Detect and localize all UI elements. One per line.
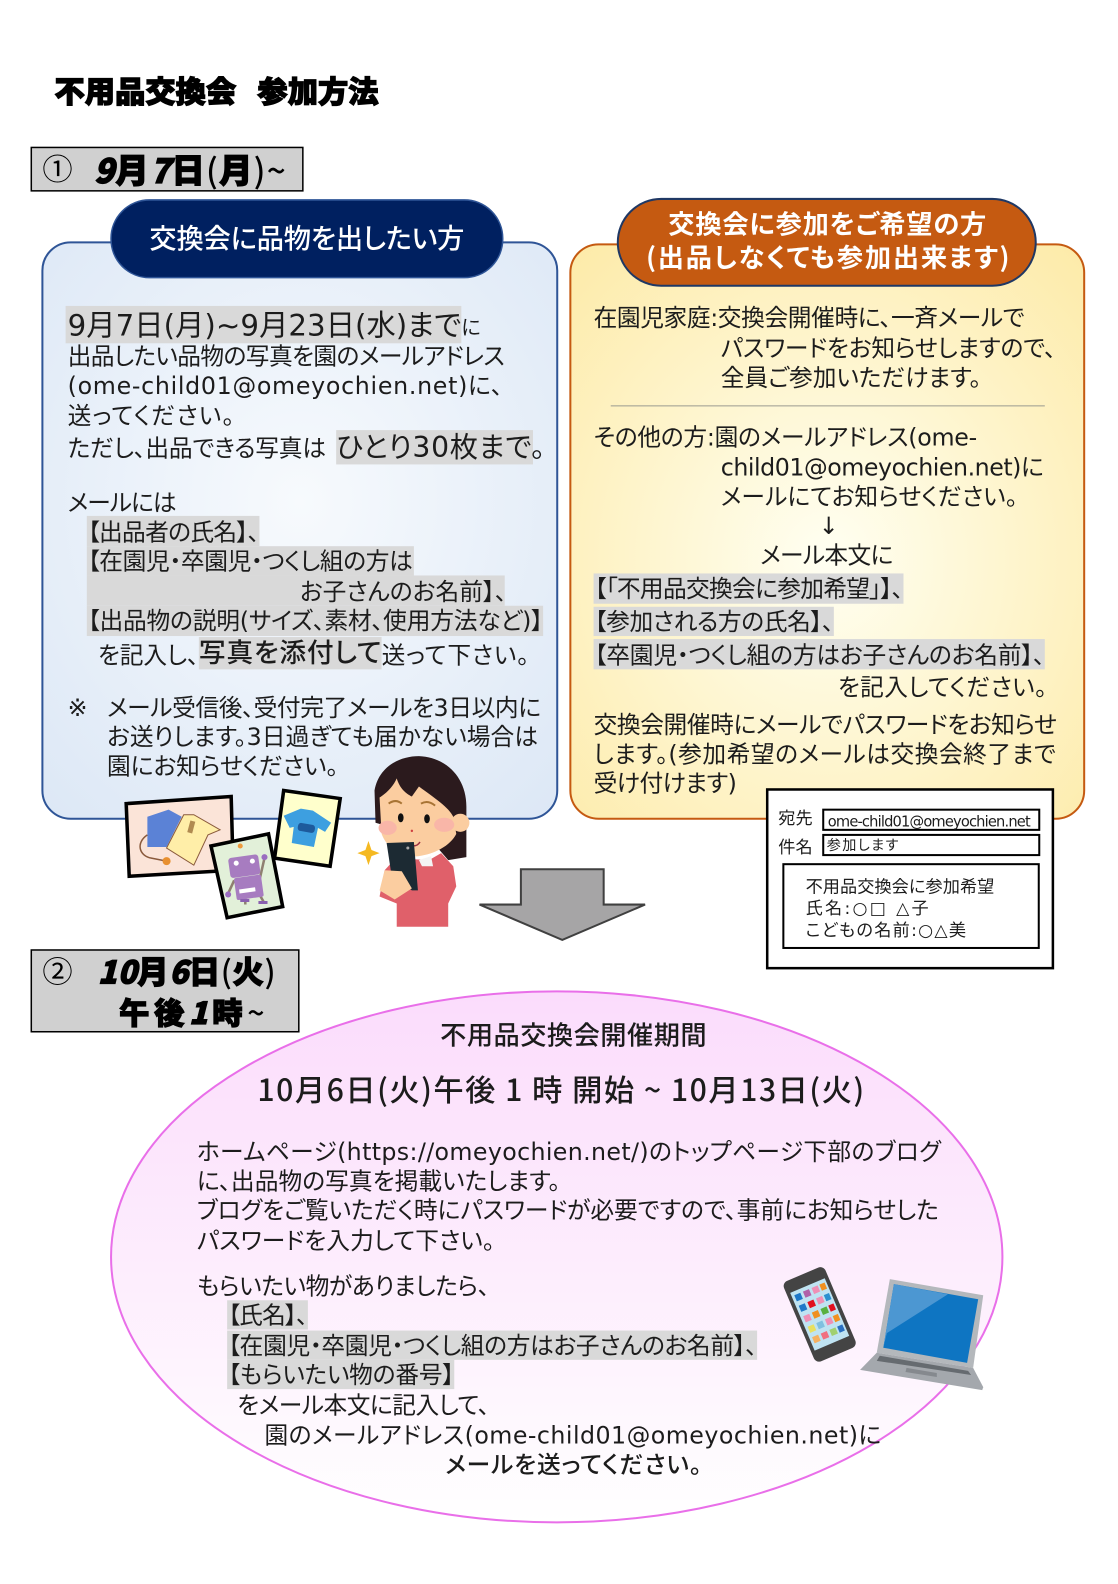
- submission period and address text: [66, 306, 545, 464]
- required mail contents text: 送って下さい。: [382, 641, 529, 669]
- request instructions text: 【もらいたい物の番号】: [228, 1361, 454, 1389]
- required mail contents text: を記入し、: [98, 641, 199, 669]
- required items text: 【参加される方の氏名】、: [595, 608, 834, 636]
- panel heading: participate: (出品しなくても参加出来ます): [646, 237, 1009, 275]
- event dates: 10月6日(火)午後 1 時 開始 ~ 10月13日(火): [257, 1066, 864, 1110]
- other participants text: メール本文に: [760, 541, 893, 569]
- note about confirmation mail: メール受信後、受付完了メールを3日以内に: [107, 694, 541, 722]
- current families text: 在園児家庭:交換会開催時に、一斉メールで: [594, 304, 1025, 332]
- required mail contents text: 【在園児・卒園児・つくし組の方は: [88, 548, 413, 576]
- note about confirmation mail: お送りします。3日過ぎても届かない場合は: [107, 723, 538, 751]
- current families text: 全員ご参加いただけます。: [721, 364, 981, 392]
- required mail contents text: 【出品物の説明(サイズ、素材、使用方法など)】: [88, 607, 543, 635]
- request instructions text: [197, 1272, 881, 1480]
- illustration: photo of clothes: [126, 797, 233, 876]
- submission period and address text: ただし、出品できる写真は: [68, 434, 326, 462]
- step 2 date label: [31, 948, 299, 1033]
- illustration: photo of t-shirt: [275, 790, 340, 866]
- illustration: smartphone: [782, 1265, 857, 1363]
- illustration: laptop: [860, 1279, 983, 1390]
- panel heading: participate: 交換会に参加をご希望の方: [668, 204, 986, 242]
- panel heading: submit items: [111, 200, 503, 278]
- submission period and address text: 送ってください。: [68, 402, 234, 430]
- panel: exchange event period: [111, 991, 1002, 1522]
- required items text: 【「不用品交換会に参加希望」】、: [595, 575, 903, 603]
- submission period and address text: 出品したい品物の写真を園のメールアドレス: [68, 343, 505, 371]
- step 2 date label: 午後1時~: [119, 989, 264, 1033]
- illustration: photo of robot: [211, 834, 283, 918]
- illustration: sparkle: [357, 841, 380, 865]
- note about confirmation mail: ※: [68, 694, 88, 722]
- blog instructions text: ブログをご覧いただく時にパスワードが必要ですので、事前にお知らせした: [197, 1197, 939, 1225]
- required items text: [594, 573, 1047, 702]
- other participants text: child01@omeyochien.net)に: [721, 454, 1044, 482]
- required mail contents text: 【出品者の氏名】、: [88, 518, 259, 546]
- email example: 宛先: [778, 809, 813, 829]
- panel heading: submit items: 交換会に品物を出したい方: [149, 216, 464, 256]
- request instructions text: をメール本文に記入して、: [237, 1391, 490, 1419]
- request instructions text: 園のメールアドレス(ome-child01@omeyochien.net)に: [264, 1422, 881, 1450]
- panel heading: participate: [618, 199, 1036, 286]
- request instructions text: 【在園児・卒園児・つくし組の方はお子さんのお名前】、: [228, 1332, 757, 1360]
- required items text: を記入してください。: [838, 674, 1047, 702]
- email example: [767, 789, 1053, 968]
- required items text: 【卒園児・つくし組の方はお子さんのお名前】、: [595, 641, 1045, 669]
- submission period and address text: に: [461, 315, 481, 339]
- other participants text: その他の方:園のメールアドレス(ome-: [594, 423, 977, 451]
- note about confirmation mail: [68, 694, 541, 780]
- step 2 date label: 10月6日(火): [98, 948, 276, 993]
- illustration: girl with smartphone: [375, 756, 469, 927]
- title: 参加方法: [257, 67, 379, 111]
- step 2 date label: ②: [42, 948, 73, 992]
- required mail contents text: メールには: [68, 489, 177, 517]
- request instructions text: もらいたい物がありましたら、: [197, 1272, 490, 1300]
- email example: 件名: [778, 838, 813, 858]
- title: 不用品交換会: [55, 67, 236, 111]
- required mail contents text: 写真を添付して: [199, 631, 382, 670]
- current families text: [594, 304, 1056, 392]
- step 1 date label: 9月7日(月)~: [94, 144, 286, 193]
- request instructions text: メールを送ってください。: [445, 1445, 702, 1480]
- panel: people who want to submit items: [42, 200, 557, 819]
- current families text: パスワードをお知らせしますので、: [721, 335, 1056, 363]
- submission period and address text: (ome-child01@omeyochien.net)に、: [68, 372, 503, 400]
- email example: 不用品交換会に参加希望: [806, 878, 994, 898]
- email example: ome-child01@omeyochien.net: [828, 813, 1031, 830]
- email example: 参加します: [827, 838, 899, 854]
- submission period and address text: 9月7日(月)~9月23日(水)まで: [68, 308, 461, 342]
- other participants text: [594, 423, 1044, 569]
- panel: people who want to participate: [570, 199, 1084, 819]
- blog instructions text: に、出品物の写真を掲載いたします。: [197, 1167, 560, 1195]
- title: [55, 67, 379, 111]
- blog instructions text: [197, 1138, 942, 1255]
- password note: します。(参加希望のメールは交換会終了まで: [594, 740, 1056, 768]
- required mail contents text: [68, 489, 543, 670]
- blog instructions text: パスワードを入力して下さい。: [197, 1227, 495, 1255]
- blog instructions text: ホームページ(https://omeyochien.net/)のトップページ下部のブログ: [197, 1138, 942, 1166]
- arrow down: [480, 869, 645, 940]
- submission period and address text: ひとり30枚まで。: [336, 431, 545, 464]
- email example: 氏名:○□ △子: [806, 899, 929, 919]
- event heading: 不用品交換会開催期間: [440, 1014, 707, 1052]
- password note: 受け付けます): [594, 770, 737, 798]
- note about confirmation mail: 園にお知らせください。: [107, 752, 338, 780]
- step 1 date label: ①: [42, 145, 73, 189]
- password note: 交換会開催時にメールでパスワードをお知らせ: [594, 711, 1057, 739]
- required mail contents text: お子さんのお名前】、: [300, 578, 507, 606]
- other participants text: ↓: [819, 512, 839, 540]
- other participants text: メールにてお知らせください。: [721, 483, 1018, 511]
- request instructions text: 【氏名】、: [228, 1302, 308, 1330]
- password note: [594, 711, 1057, 798]
- email example: こどもの名前:○△美: [806, 921, 966, 941]
